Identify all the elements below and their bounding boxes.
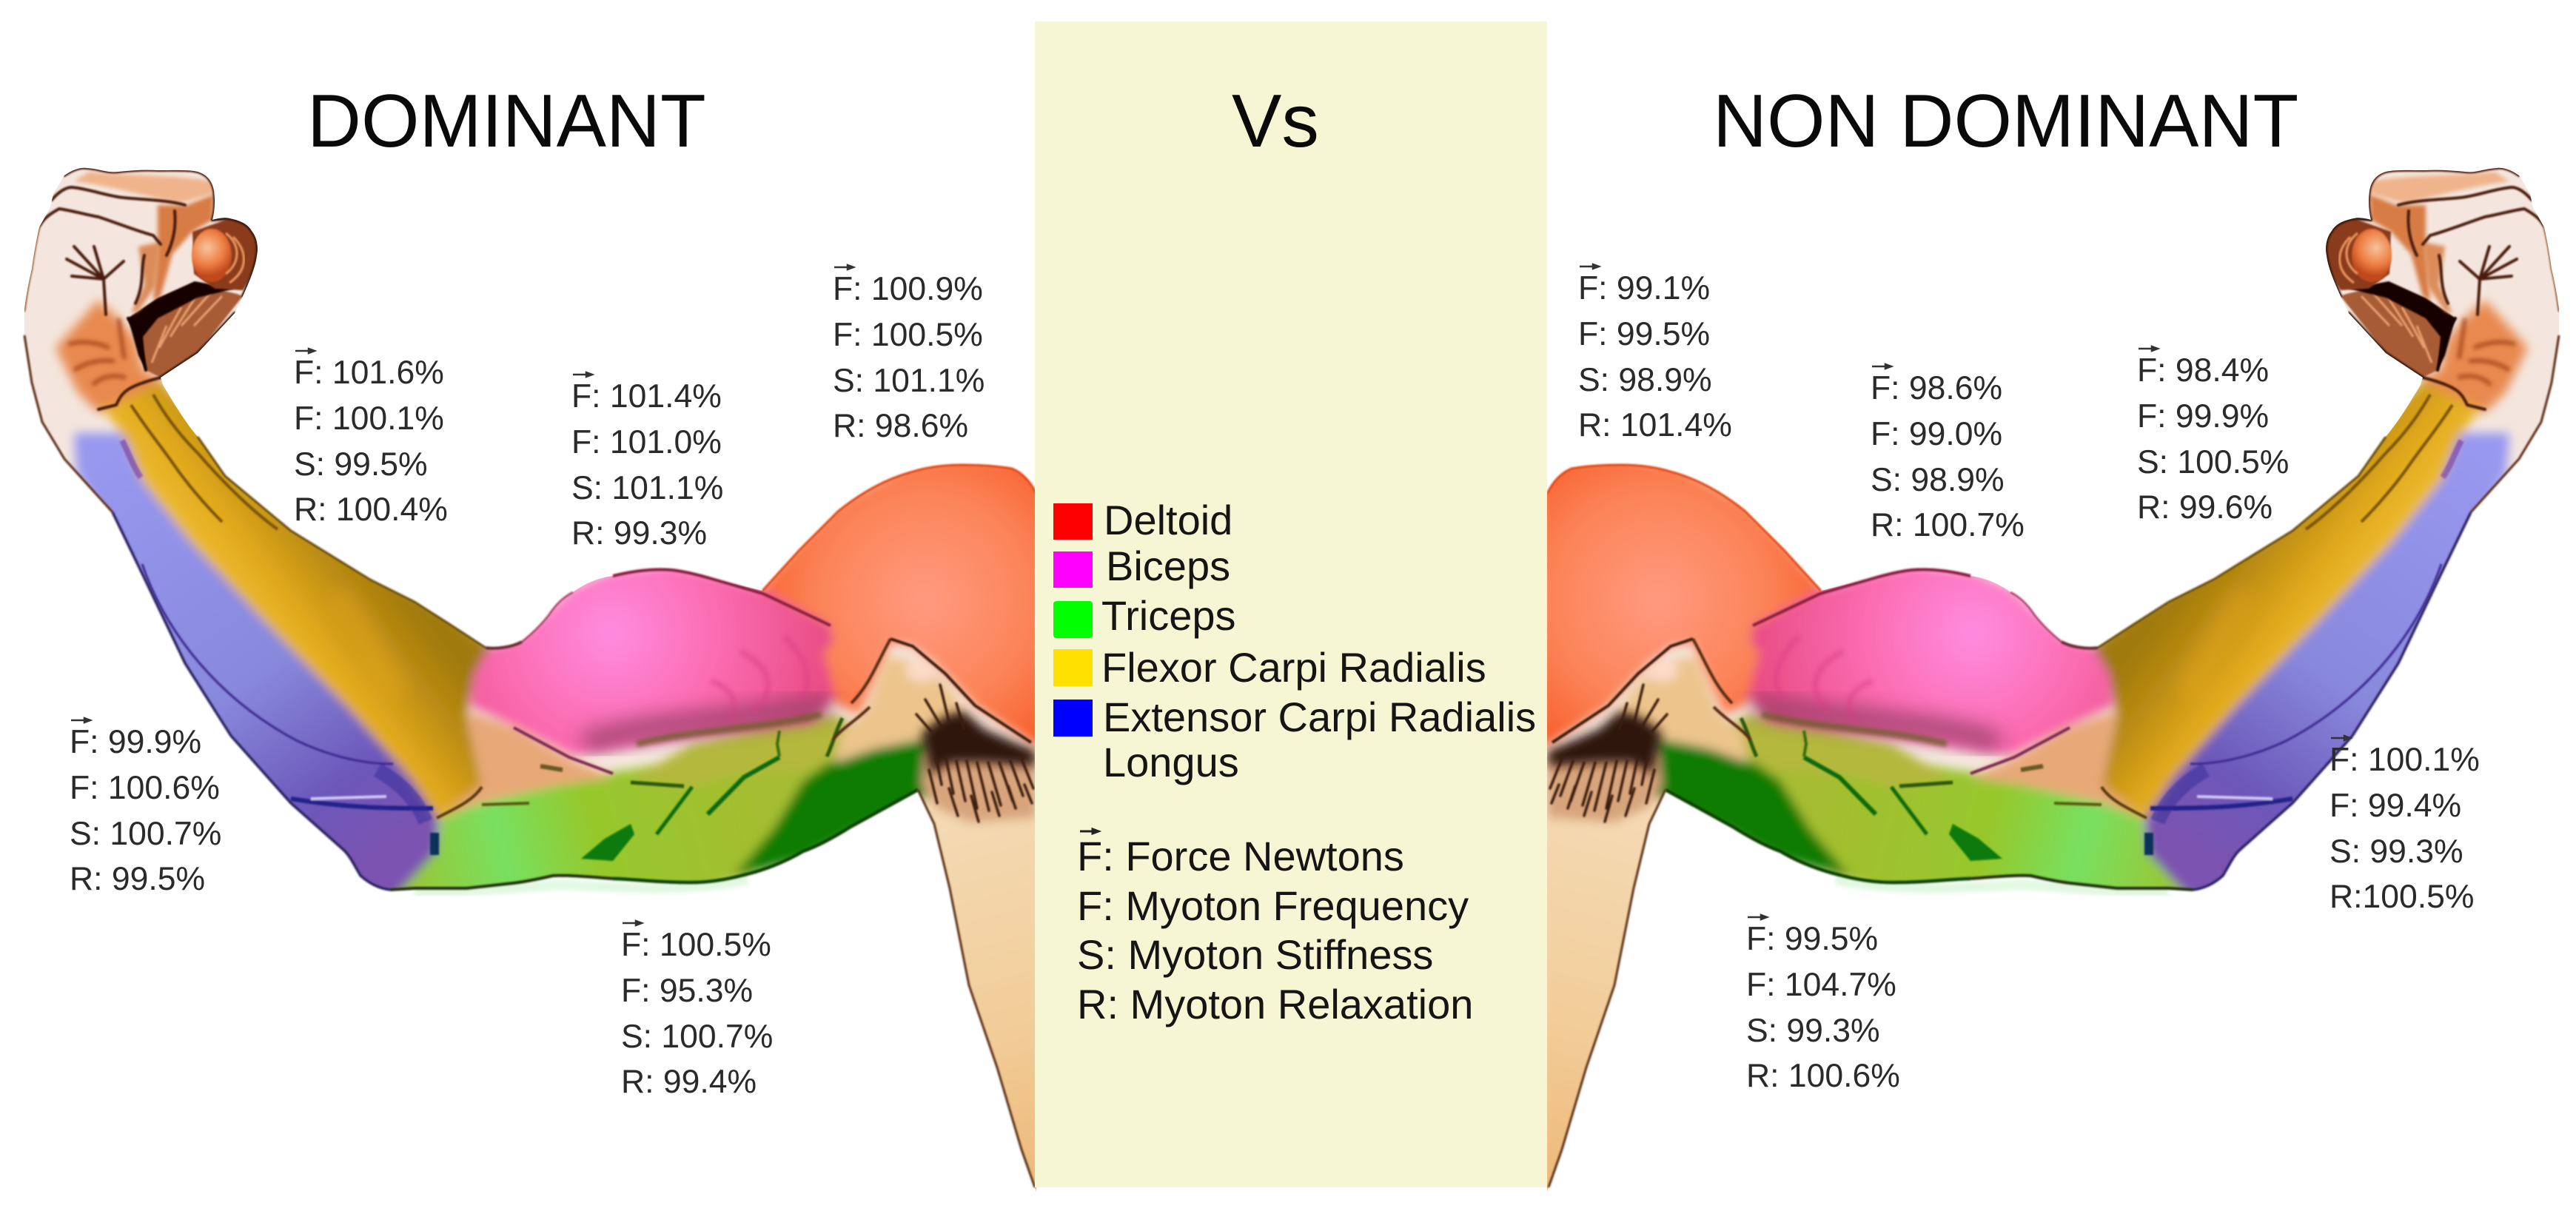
values: dominant flexor: F: 100.1% [294, 400, 444, 437]
values: dominant extensor: R: 99.5% [70, 861, 205, 897]
values: dominant flexor [294, 349, 448, 528]
thumb back [192, 218, 258, 290]
values: dominant biceps: S: 101.1% [571, 470, 723, 506]
values: non dominant extensor: S: 99.3% [2330, 834, 2463, 870]
values: non dominant biceps: F: 98.6% [1871, 370, 2002, 406]
legend: measure abbreviations: F: Force Newtons [1077, 833, 1404, 879]
values: dominant biceps: R: 99.3% [571, 515, 707, 551]
biceps texture [711, 637, 807, 722]
thumb nail lines [226, 233, 244, 283]
values: dominant extensor [70, 718, 221, 897]
front knuckle edge [131, 242, 161, 313]
values: non dominant deltoid: F: 99.1% [1578, 270, 1710, 306]
values: non dominant flexor [2137, 346, 2289, 526]
heading: non dominant: NON DOMINANT [1713, 80, 2298, 163]
armpit hair [916, 685, 1035, 822]
values: non dominant triceps: F: 99.5% [1746, 921, 1878, 957]
muscle: torso [910, 777, 1044, 1199]
finger top orange [74, 172, 214, 204]
upper edge lines [24, 335, 1036, 1187]
values: non dominant triceps: F: 104.7% [1746, 967, 1896, 1003]
illustration: non dominant arm, mirrored [1540, 148, 2576, 1199]
values: non dominant flexor: F: 99.9% [2137, 398, 2269, 435]
values: non dominant biceps: S: 98.9% [1871, 462, 2005, 498]
biceps lower shadow [585, 703, 831, 744]
values: non dominant extensor [2330, 736, 2480, 915]
values: non dominant flexor: R: 99.6% [2137, 489, 2273, 526]
legend: muscle colours [1053, 497, 1536, 785]
thumb tip [192, 229, 232, 282]
triceps patches and veins [482, 639, 1031, 861]
values: dominant flexor: S: 99.5% [294, 446, 428, 483]
values: dominant extensor: F: 99.9% [70, 724, 201, 760]
legend: measure abbreviations [1077, 829, 1473, 1027]
palm stripes [152, 292, 222, 363]
legend: measure abbreviations: R: Myoton Relaxation [1077, 981, 1473, 1027]
swatch and label: biceps: Biceps [1106, 543, 1230, 589]
extensor veins [122, 395, 482, 855]
values: dominant triceps: R: 99.4% [621, 1064, 757, 1100]
illustration: dominant arm with coloured muscles [0, 148, 1044, 1199]
values: dominant triceps: S: 100.7% [621, 1019, 773, 1055]
values: non dominant extensor: F: 100.1% [2330, 742, 2480, 778]
swatch and label: triceps: Triceps [1101, 592, 1236, 639]
values: dominant triceps: F: 100.5% [621, 927, 771, 963]
flexor highlight [337, 592, 396, 696]
values: dominant extensor: S: 100.7% [70, 816, 221, 852]
values: non dominant triceps: R: 100.6% [1746, 1058, 1900, 1094]
lower hand streaks [68, 318, 126, 385]
muscle: triceps [392, 740, 844, 899]
palm [128, 284, 243, 378]
palm black crease [128, 281, 235, 370]
values: dominant flexor: R: 100.4% [294, 492, 448, 528]
muscle: under-arm striped base [922, 751, 1036, 823]
values: non dominant triceps [1746, 915, 1900, 1094]
values: dominant deltoid [833, 265, 985, 444]
muscle: shoulder skin [836, 657, 973, 762]
values: non dominant biceps: R: 100.7% [1871, 507, 2025, 543]
panel: centre comparison column [1035, 21, 1547, 1187]
muscle: elbow tan [440, 711, 614, 818]
values: non dominant deltoid: S: 98.9% [1578, 362, 1712, 398]
swatch and label: extensor carpi radialis longus: Longus [1103, 739, 1239, 785]
legend: measure abbreviations: S: Myoton Stiffness [1077, 931, 1433, 978]
values: non dominant extensor: F: 99.4% [2330, 788, 2461, 824]
muscle: deltoid [755, 457, 1044, 748]
values: dominant biceps: F: 101.0% [571, 424, 722, 460]
muscle: hand shading [56, 300, 163, 413]
values: non dominant deltoid: F: 99.5% [1578, 316, 1710, 352]
values: dominant deltoid: F: 100.5% [833, 317, 983, 353]
values: non dominant biceps: F: 99.0% [1871, 416, 2002, 452]
values: dominant biceps: F: 101.4% [571, 378, 722, 415]
muscle: triceps dark green [733, 737, 933, 877]
muscle: biceps [470, 566, 835, 755]
values: dominant deltoid: R: 98.6% [833, 408, 968, 444]
values: dominant extensor: F: 100.6% [70, 770, 220, 806]
values: non dominant deltoid: R: 101.4% [1578, 407, 1732, 443]
swatch and label: extensor carpi radialis longus [1053, 694, 1536, 785]
heading: versus: Vs [1232, 80, 1319, 163]
swatch and label: deltoid: Deltoid [1104, 497, 1232, 543]
heading: dominant: DOMINANT [307, 80, 706, 163]
values: dominant flexor: F: 101.6% [294, 355, 444, 391]
swatch and label: extensor carpi radialis longus: Extensor Carpi Radialis [1103, 694, 1536, 740]
hand detail [24, 168, 258, 409]
values: non dominant deltoid [1578, 264, 1732, 443]
values: dominant biceps [571, 372, 723, 551]
values: non dominant flexor: S: 100.5% [2137, 444, 2289, 480]
values: dominant triceps [621, 921, 773, 1100]
values: dominant deltoid: S: 101.1% [833, 363, 985, 399]
muscle: shoulder glow [905, 658, 938, 682]
values: non dominant triceps: S: 99.3% [1746, 1013, 1880, 1049]
muscle: flexor carpi radialis [104, 381, 496, 819]
values: non dominant flexor: F: 98.4% [2137, 352, 2269, 389]
values: dominant deltoid: F: 100.9% [833, 271, 983, 307]
values: non dominant biceps [1871, 364, 2025, 543]
swatch and label: flexor carpi radialis: Flexor Carpi Radialis [1101, 644, 1486, 691]
legend: measure abbreviations: F: Myoton Frequency [1077, 882, 1469, 929]
muscle: triceps olive upper band [629, 714, 885, 788]
muscle: extensor carpi radialis longus [74, 433, 438, 899]
outlines and creases [24, 168, 258, 409]
values: dominant triceps: F: 95.3% [621, 973, 753, 1009]
biceps under-edge olive [637, 714, 822, 744]
values: non dominant extensor: R:100.5% [2330, 879, 2474, 915]
finger side orange [153, 194, 214, 301]
